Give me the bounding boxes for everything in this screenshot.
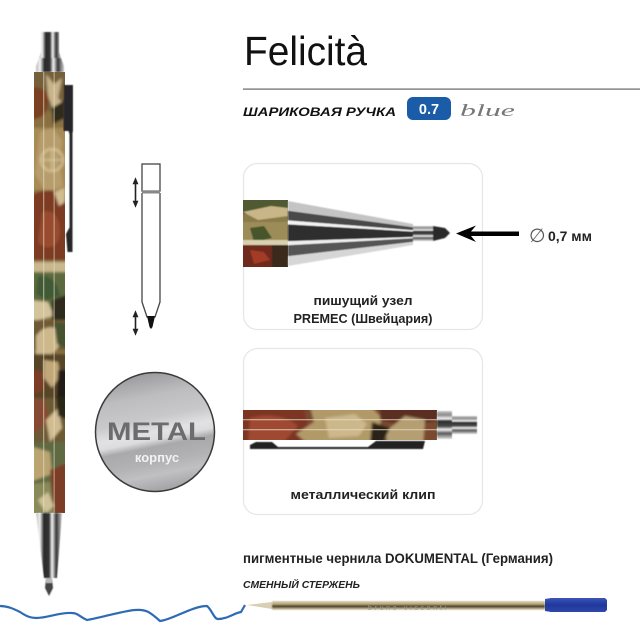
badge: tip size 0.7: 0.7 bbox=[419, 102, 439, 118]
title: Felicità bbox=[244, 28, 367, 74]
refill heading: СМЕННЫЙ СТЕРЖЕНЬ bbox=[243, 578, 361, 591]
refill black tip bbox=[147, 316, 155, 329]
panel: writing tip bbox=[240, 164, 482, 330]
pen floral barrel bbox=[34, 72, 65, 513]
pen push button bbox=[36, 32, 64, 72]
refill outline bbox=[142, 164, 160, 317]
ink squiggle bbox=[0, 605, 245, 621]
divider bbox=[243, 88, 640, 90]
pen: full product vertical bbox=[30, 32, 73, 596]
badge: tip size 0.7 bbox=[407, 97, 451, 120]
panel: metal clip bbox=[240, 348, 482, 514]
tip photo bbox=[240, 197, 450, 270]
caption: metal clip: металлический клип bbox=[290, 487, 436, 502]
caption: writing tip: пишущий узел bbox=[314, 293, 412, 308]
ink note: пигментные чернила DOKUMENTAL (Германия) bbox=[243, 551, 553, 566]
double arrow top bbox=[133, 178, 138, 207]
caption: writing tip bbox=[294, 293, 432, 326]
double arrow bottom bbox=[133, 311, 138, 335]
ink colour script: blue bbox=[460, 101, 516, 120]
refill bbox=[247, 598, 607, 612]
clip photo bbox=[240, 406, 477, 449]
корпус label: корпус bbox=[135, 450, 179, 465]
tip diameter label: ∅ bbox=[529, 226, 546, 247]
subtitle: ШАРИКОВАЯ РУЧКА bbox=[243, 105, 396, 119]
pen chrome cone and tip bbox=[36, 513, 62, 596]
refill brand engraving: bruno visconti bbox=[368, 605, 446, 612]
tip diameter label: 0,7 мм bbox=[548, 228, 592, 244]
diagram: pencil retract schematic bbox=[133, 164, 160, 335]
METAL label: METAL bbox=[107, 418, 206, 446]
refill blue cap bbox=[545, 598, 607, 612]
tip diameter label bbox=[529, 226, 592, 247]
arrow: to tip bbox=[456, 226, 519, 242]
badge: metal body bbox=[96, 372, 214, 492]
caption: writing tip: PREMEC (Швейцария) bbox=[294, 311, 432, 326]
pen clip bbox=[64, 85, 73, 252]
